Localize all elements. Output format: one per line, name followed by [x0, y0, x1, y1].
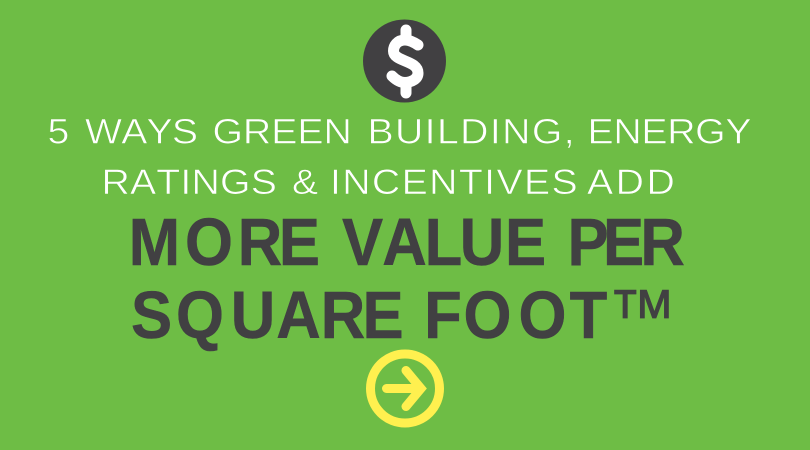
subtitle line 2: RATINGS [101, 162, 288, 202]
subtitle line 1: GREEN [212, 111, 363, 151]
subtitle line 1: BUILDING, [367, 111, 588, 151]
icon: arrow in circle [370, 354, 440, 423]
subtitle line 1: ENERGY [588, 111, 751, 151]
subtitle line 2: & [292, 162, 329, 202]
heading line 2: SQUARE FOOT [131, 278, 607, 353]
subtitle line 2: INCENTIVES [330, 162, 591, 202]
subtitle line 1: WAYS [85, 111, 207, 151]
heading line 1: MORE VALUE PER [129, 205, 685, 280]
heading line 2: ™ [608, 275, 676, 358]
subtitle line 1: 5 [47, 111, 80, 151]
subtitle line 2: ADD [587, 162, 677, 202]
icon: dollar coin [363, 20, 446, 102]
